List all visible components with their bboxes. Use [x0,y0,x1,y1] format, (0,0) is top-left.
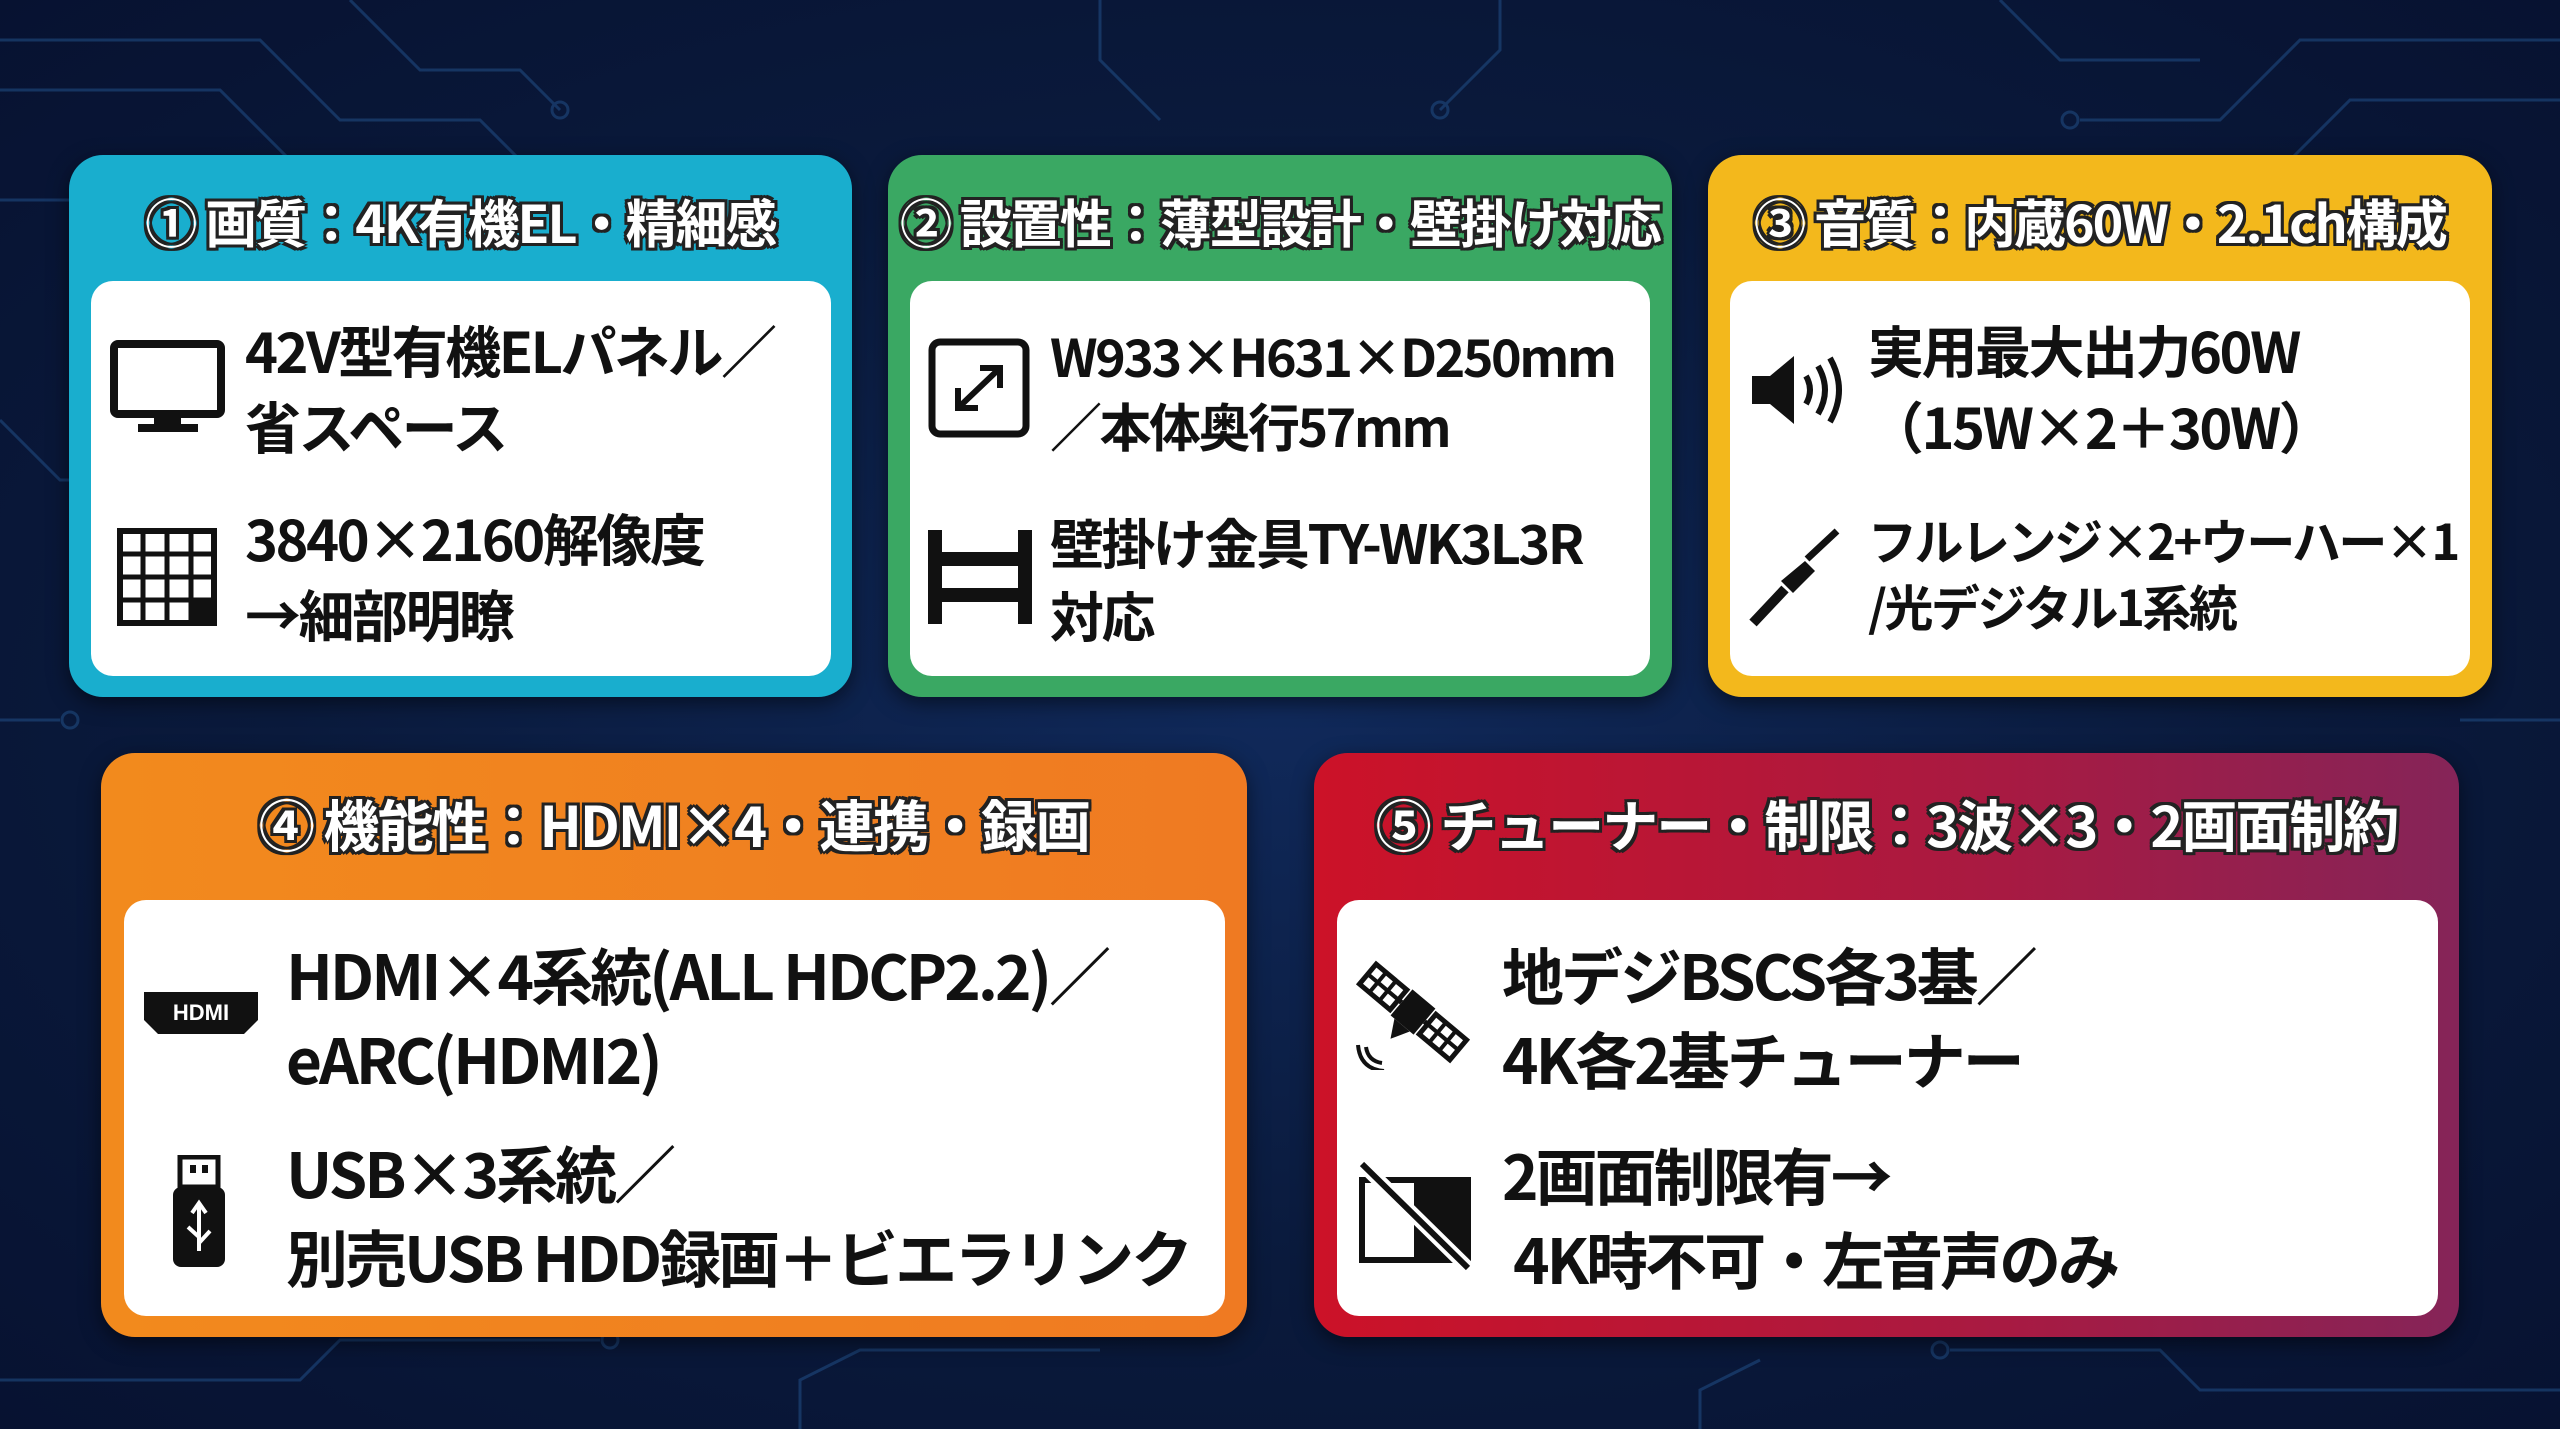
text: resolution: →細部明瞭 [245,573,512,654]
text: dimensions: ／本体奥行57mm [1050,387,1449,462]
panel: tuner [1314,753,2459,1337]
text: tuners: 4K各2基チューナー [1502,1012,2022,1102]
icon: usb [173,1155,225,1267]
heading: ⑤ チューナー・制限：3波×3・2画面制約 [1376,783,2397,864]
text: usb: 別売USB HDD録画＋ビエラリンク [286,1210,1190,1300]
text: speakers: /光デジタル1系統 [1868,570,2235,641]
content box [1730,281,2470,676]
heading: ③ 音質：内蔵60W・2.1ch構成 [1754,183,2446,258]
text: tuners: 地デジBSCS各3基／ [1502,928,2035,1018]
text: restriction [1502,1128,2118,1302]
text: dimensions: W933×H631×D250mm [1050,317,1614,392]
icon: hdmi [144,992,258,1034]
icon: no split screen [1359,1162,1471,1270]
text: tuners [1502,928,2036,1102]
icon: speaker [1752,356,1842,424]
text: wall bracket: 対応 [1050,574,1153,653]
text: resolution [245,497,704,654]
heading: ① 画質：4K有機EL・精細感 [145,183,776,258]
text: panel spec: 42V型有機ELパネル／ [245,309,775,390]
panel: sound [1708,155,2492,697]
panel: features [101,753,1247,1337]
text: panel spec [245,309,776,466]
icon: tv [110,340,225,432]
text: output: 実用最大出力60W [1868,309,2299,390]
text: wall bracket [1050,501,1584,653]
icon: hdmi: HDMI [173,1000,229,1025]
text: hdmi: HDMI×4系統(ALL HDCP2.2)／ [286,928,1108,1018]
panel: installation [888,155,1672,697]
content box [910,281,1650,676]
text: hdmi [286,928,1110,1102]
text: usb: USB×3系統／ [286,1126,673,1216]
text: restriction: 2画面制限有→ [1502,1128,1890,1218]
text: output: （15W×2＋30W） [1868,385,2332,466]
text: panel spec: 省スペース [245,385,506,466]
heading: ② 設置性：薄型設計・壁掛け対応 [900,183,1660,258]
text: wall bracket: 壁掛け金具TY-WK3L3R [1050,501,1582,580]
content box [91,281,831,676]
text: speakers [1868,504,2458,641]
icon: grid [117,528,217,626]
text: speakers: フルレンジ×2+ウーハー×1 [1868,504,2458,575]
text: dimensions [1050,317,1614,462]
text: output [1868,309,2332,466]
content box [124,900,1225,1316]
heading: ④ 機能性：HDMI×4・連携・録画 [259,783,1089,864]
text: usb [286,1126,1190,1300]
icon: satellite [1356,960,1470,1070]
text: hdmi: eARC(HDMI2) [286,1012,660,1102]
text: resolution: 3840×2160解像度 [245,497,703,578]
content box [1337,900,2438,1316]
icon: resize [928,338,1030,438]
icon: audio plug [1749,528,1840,626]
icon: wall mount [928,530,1032,624]
panel: picture quality [69,155,852,697]
text: restriction: 4K時不可・左音声のみ [1513,1212,2117,1302]
